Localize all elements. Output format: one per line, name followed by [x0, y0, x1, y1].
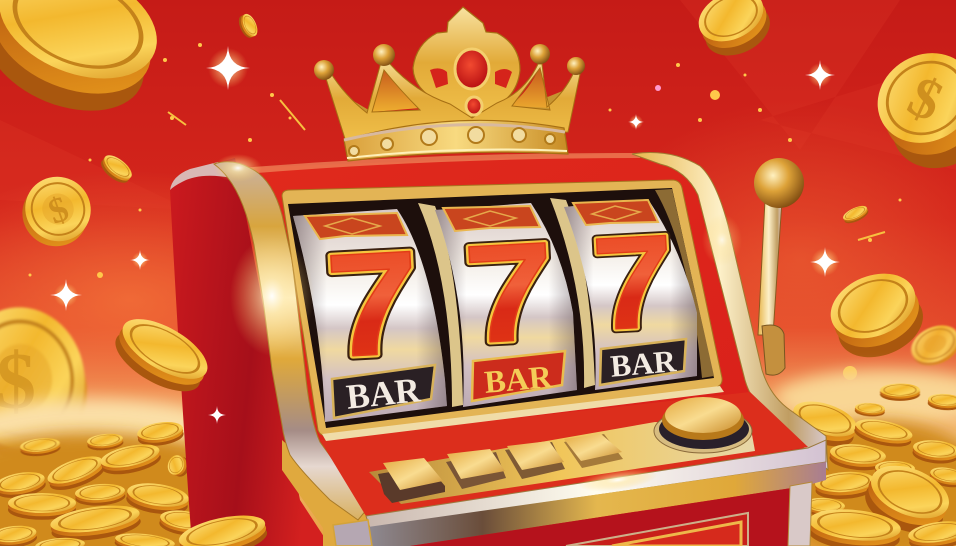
lever — [754, 158, 804, 375]
reel strip — [435, 203, 577, 407]
coin: left big — [0, 297, 98, 471]
button 3 — [505, 441, 565, 479]
lower front band — [368, 462, 826, 546]
control deck — [320, 386, 826, 546]
crown inner panels — [372, 66, 550, 112]
separator chrome — [550, 198, 595, 388]
foreground coins over the cabinet — [106, 307, 270, 546]
inner right wall — [655, 189, 714, 378]
sparkles and stars — [28, 43, 902, 380]
crown — [314, 7, 585, 161]
reel strip — [564, 199, 697, 390]
base red panel — [410, 488, 792, 546]
BAR plaque: BAR — [483, 358, 554, 400]
seven: 7 — [322, 220, 424, 389]
left crown point — [324, 55, 580, 142]
coin: pile front — [176, 509, 270, 546]
coin: small right — [841, 203, 870, 226]
reel window frame — [282, 180, 722, 436]
left chrome band — [214, 162, 368, 520]
coin: top center right — [690, 0, 778, 65]
reel side shading — [564, 199, 697, 390]
BAR plaque — [472, 351, 565, 401]
scroll cut-outs — [430, 68, 512, 88]
reel side shading — [435, 203, 577, 407]
reel window dark inset — [288, 188, 714, 428]
big spin button — [654, 397, 752, 453]
coin pile: right — [770, 370, 956, 546]
seven: 7 — [322, 220, 424, 389]
top plaque — [573, 200, 658, 225]
window lower lip — [322, 386, 724, 441]
crown band — [344, 120, 568, 161]
chrome lip — [366, 440, 826, 528]
decorative plaque — [566, 513, 748, 546]
ruby — [455, 49, 489, 89]
coin: tiny top — [236, 12, 261, 40]
reel 3 — [550, 198, 697, 390]
seven: 7 — [589, 207, 678, 358]
seven: 7 — [460, 213, 559, 373]
coin: top right with dollar — [861, 36, 956, 186]
band jewels — [349, 127, 555, 156]
BAR plaque — [332, 365, 435, 418]
coin: left mid — [106, 307, 217, 403]
coin: right mid — [821, 262, 933, 369]
chrome corner left — [333, 520, 372, 546]
coin: left with dollar: $ — [43, 188, 74, 232]
crown balls — [314, 44, 585, 80]
top plaque — [305, 213, 407, 239]
top plaque — [443, 206, 540, 231]
seven: 7 — [589, 207, 678, 358]
separator chrome — [418, 203, 463, 407]
button 1 — [378, 458, 445, 503]
right chrome band — [632, 152, 828, 470]
gold button tray — [369, 422, 755, 504]
front body — [240, 153, 815, 546]
light flares — [214, 154, 742, 495]
deck red surface — [320, 392, 808, 516]
star on cabinet side — [208, 406, 226, 424]
left lower gold skirt — [282, 440, 372, 546]
reel side shading — [293, 209, 447, 422]
coin: small left — [97, 151, 136, 187]
side top silver rim — [170, 162, 232, 190]
button 2 — [446, 449, 506, 489]
lever base — [762, 325, 785, 375]
center scrollwork — [413, 7, 520, 118]
reel strip — [293, 209, 447, 422]
BAR plaque — [600, 339, 686, 385]
cabinet base — [333, 482, 812, 546]
reel 1 — [293, 209, 447, 422]
seven: 7 — [460, 213, 559, 373]
lever shaft — [758, 200, 782, 335]
side panel — [170, 158, 330, 546]
coin pile: left — [0, 399, 260, 546]
BAR plaque: BAR — [609, 343, 678, 384]
crown back points — [335, 90, 565, 138]
band lower rim — [347, 150, 567, 158]
coin: right blurred — [905, 318, 956, 373]
coin: left with dollar — [11, 165, 103, 258]
BAR plaque: BAR — [344, 370, 423, 417]
band highlight — [344, 125, 565, 140]
small ruby pendant — [466, 97, 482, 115]
reel 2 — [418, 203, 577, 407]
seven: 7 — [589, 207, 678, 358]
top edge highlight — [240, 153, 640, 174]
seven: 7 — [322, 220, 424, 389]
coin: top right with dollar: $ — [899, 63, 953, 134]
seven: 7 — [460, 213, 559, 373]
lever ball — [754, 158, 804, 208]
slot machine — [170, 152, 828, 546]
button 4 — [564, 434, 623, 468]
coin: top left large — [0, 0, 174, 132]
chrome leg — [788, 482, 812, 546]
